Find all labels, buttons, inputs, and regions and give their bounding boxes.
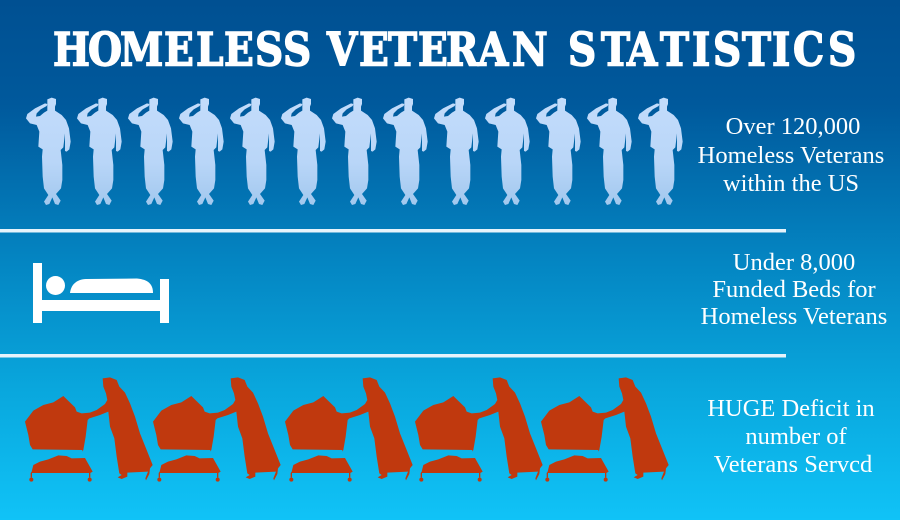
- stat text: deficit: Veterans Servcd: [714, 451, 872, 478]
- stat text: homeless veterans: within the US: [723, 170, 859, 197]
- stat text: deficit: HUGE Deficit in: [707, 395, 875, 422]
- stat text: homeless veterans: Over 120,000: [726, 113, 860, 140]
- stat text: homeless veterans: [698, 113, 884, 197]
- soldier row: [26, 98, 683, 205]
- stat text: funded beds: Funded Beds for: [712, 276, 876, 303]
- stat text: funded beds: Under 8,000: [733, 249, 855, 276]
- divider bottom: [0, 354, 786, 358]
- shopping cart figures row: [25, 377, 669, 482]
- divider top: [0, 229, 786, 232]
- icon: bed: [33, 263, 169, 323]
- stat text: funded beds: Homeless Veterans: [701, 303, 887, 330]
- stat text: deficit: [707, 395, 875, 478]
- stat text: funded beds: [701, 249, 887, 330]
- title: HOMELESS VETERAN STATISTICS: [53, 23, 856, 77]
- stat text: deficit: number of: [745, 423, 848, 450]
- stat text: homeless veterans: Homeless Veterans: [698, 142, 884, 169]
